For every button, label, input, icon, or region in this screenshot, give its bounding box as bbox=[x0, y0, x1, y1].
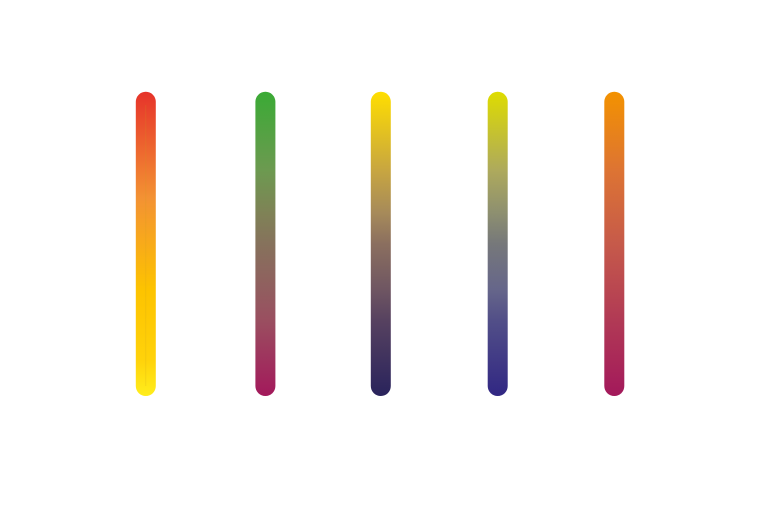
bar 1: red to yellow bbox=[136, 92, 156, 396]
bar 5: orange to magenta bbox=[604, 92, 624, 396]
bar 4: lime to indigo bbox=[488, 92, 508, 396]
bar 3: yellow to dark navy bbox=[371, 92, 391, 396]
bar 2: green to magenta bbox=[255, 92, 275, 396]
